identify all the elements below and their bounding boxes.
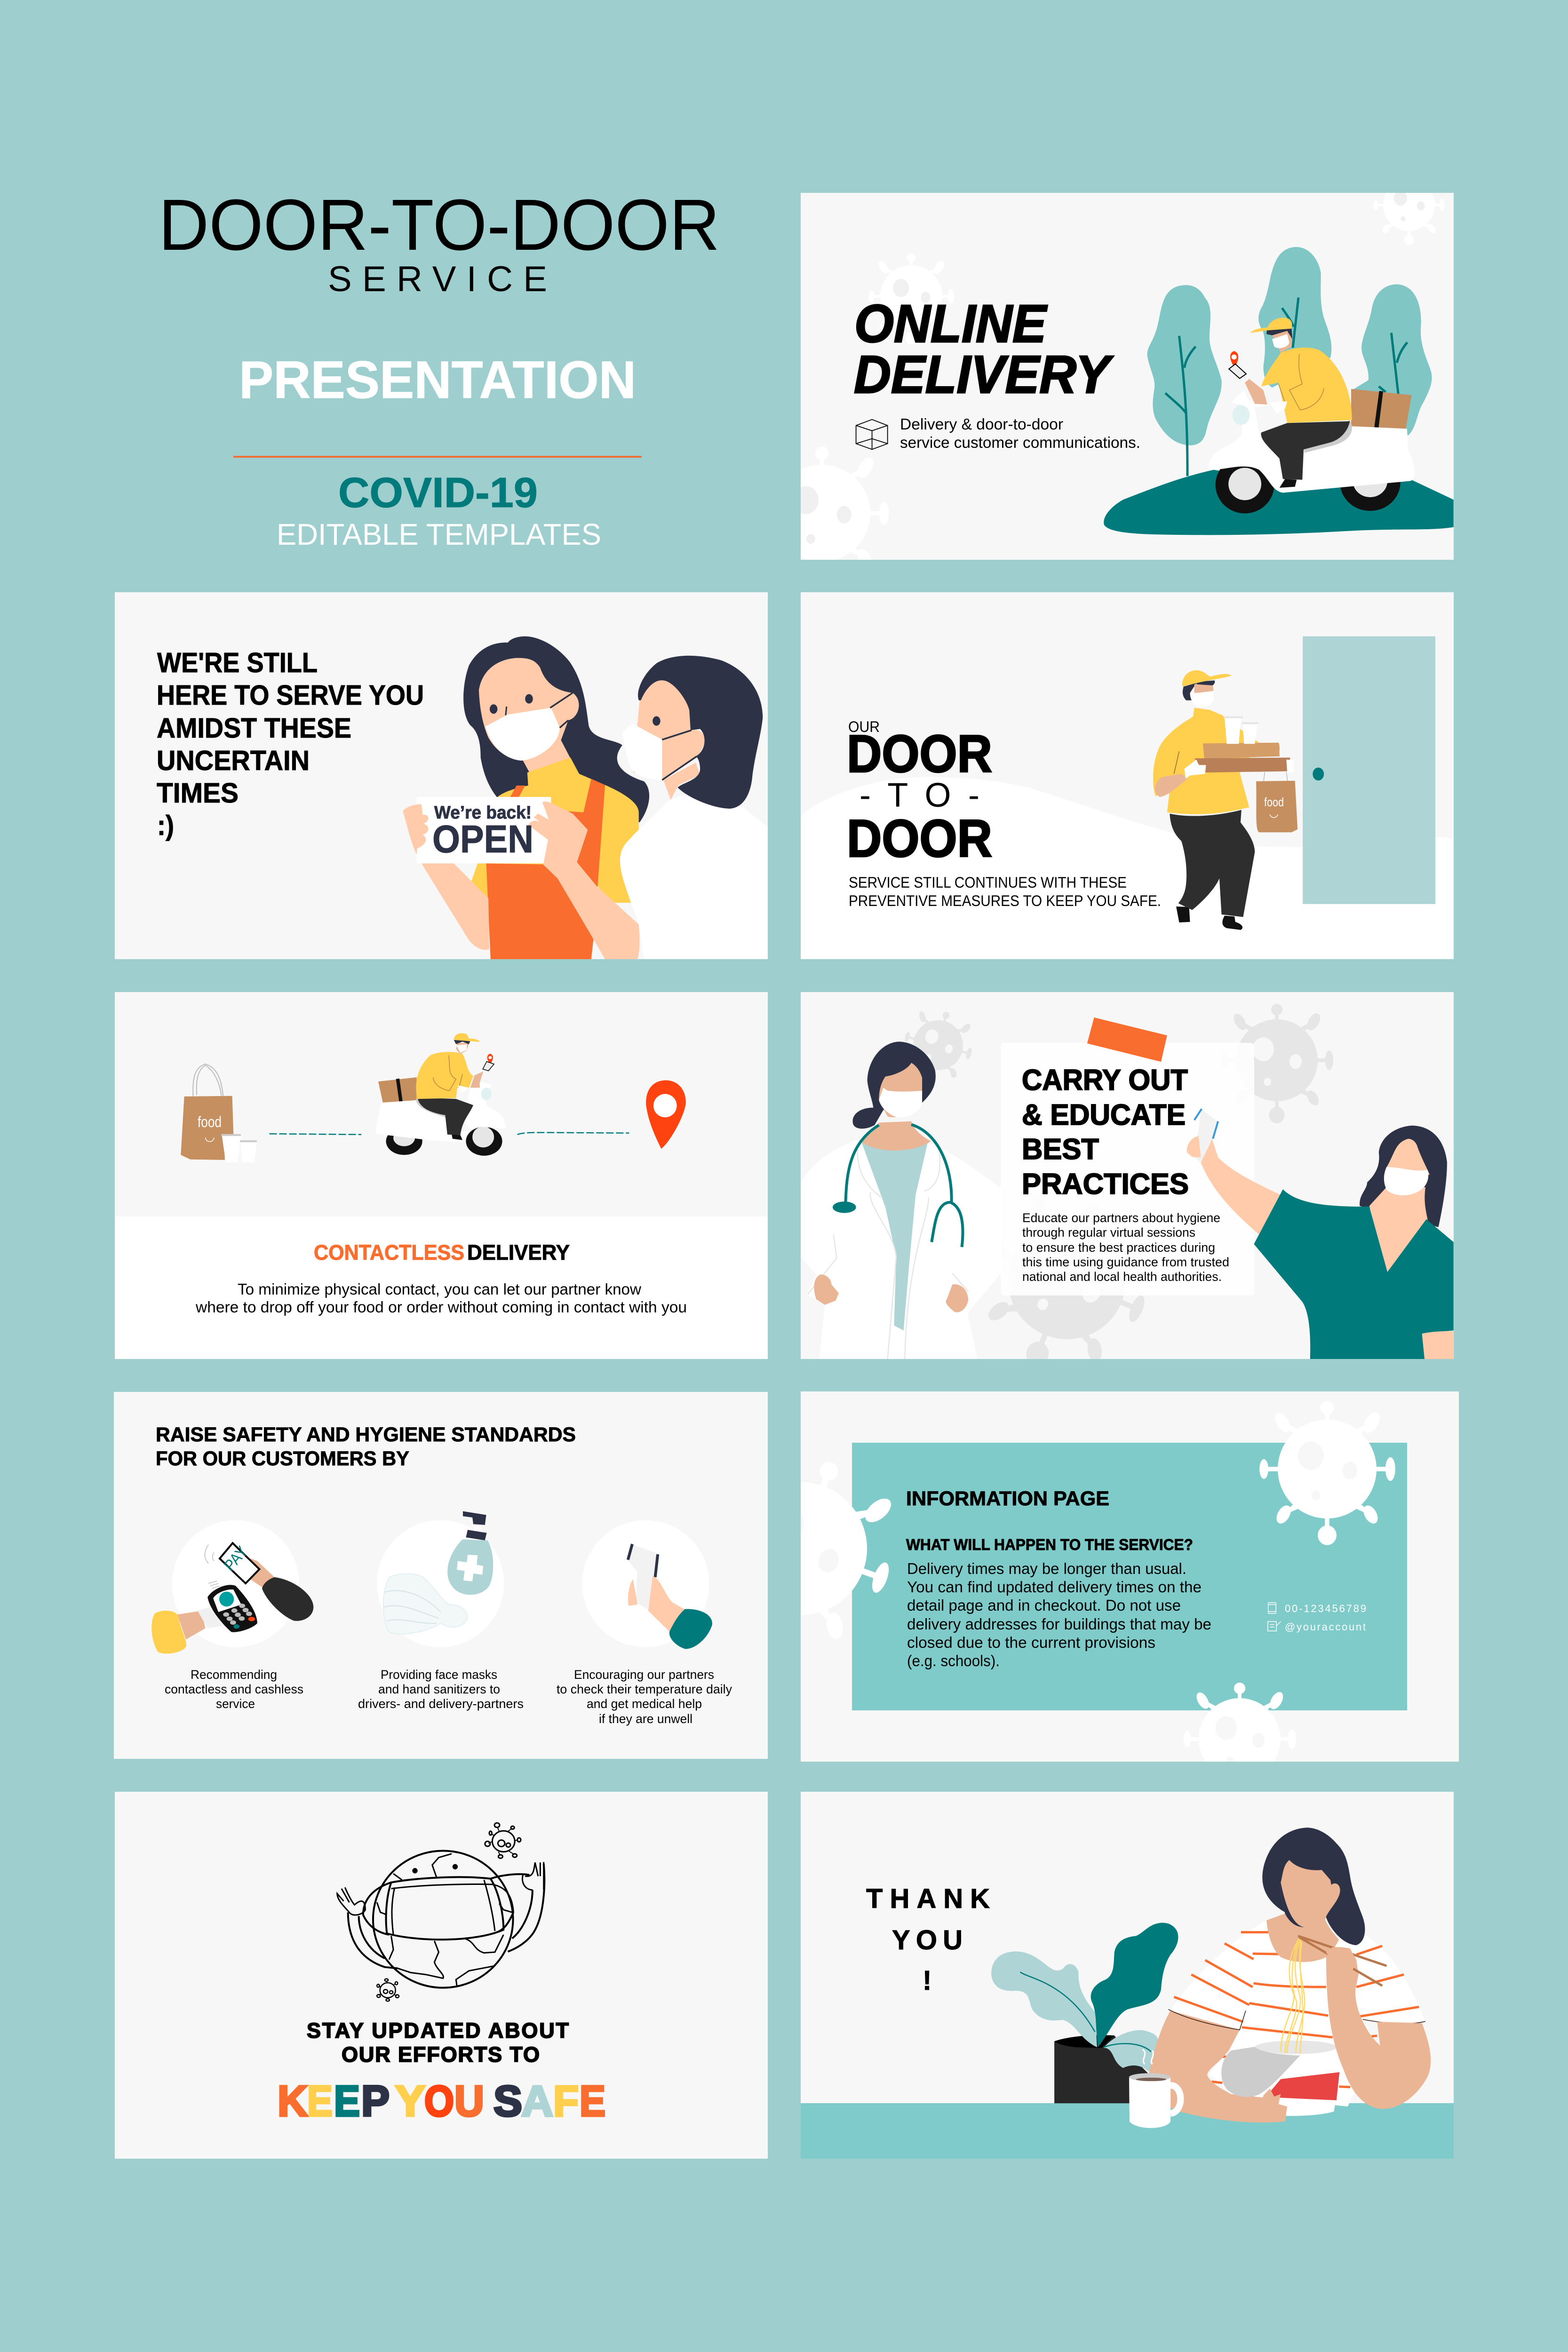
heading: still here <box>157 647 424 841</box>
description text: SERVICE STILL CONTINUES WITH THESE <box>849 874 1127 891</box>
heading: stay updated <box>307 2018 569 2066</box>
heading: carry out: CARRY OUT <box>1022 1064 1188 1097</box>
subheading: editable templates: EDITABLE TEMPLATES <box>277 517 601 551</box>
illustration: coffee mug <box>1129 2049 1181 2128</box>
caption: temperature checks: Encouraging our partners <box>574 1668 714 1682</box>
arrow: dashed route <box>270 1133 629 1135</box>
body text: You can find updated delivery times on the <box>907 1578 1202 1596</box>
caption: temperature checks <box>557 1668 732 1726</box>
body text <box>907 1560 1211 1669</box>
illustration: two women holding open sign <box>403 636 768 959</box>
illustration: courier at door <box>801 592 1454 930</box>
contact details <box>1268 1603 1366 1633</box>
contact: account: @youraccount <box>1285 1621 1366 1633</box>
heading: door to door: OUR <box>848 718 880 735</box>
caption: contactless service: service <box>216 1697 255 1711</box>
illustration: doctor <box>801 1041 1002 1359</box>
heading: door to door: DOOR <box>847 724 992 783</box>
heading: door to door: DOOR <box>847 809 992 868</box>
panel: contactless delivery <box>115 992 768 1359</box>
title block <box>159 184 720 551</box>
heading: thank you: ! <box>923 1965 931 1996</box>
caption: masks and sanitizers: Providing face masks <box>381 1668 497 1682</box>
illustration: woman eating noodles <box>1149 1828 1431 2122</box>
description text: To minimize physical contact, you can let our partner know <box>238 1280 641 1298</box>
heading: online delivery: DELIVERY <box>854 345 1114 404</box>
icon: face mask and hand sanitizer <box>377 1511 504 1647</box>
illustration: scooter rider with trees <box>1104 247 1454 535</box>
heading: presentation: PRESENTATION <box>239 350 636 409</box>
label: pay: PAY <box>221 1543 251 1574</box>
panel: our door to door <box>801 592 1454 959</box>
heading: still here: HERE TO SERVE YOU <box>157 680 424 711</box>
heading: keep you safe: O <box>424 2077 454 2125</box>
heading: thank you <box>866 1883 990 1996</box>
heading: information page: INFORMATION PAGE <box>906 1487 1109 1510</box>
caption: masks and sanitizers: and hand sanitizers to <box>378 1682 500 1696</box>
bag label: food <box>1264 795 1284 809</box>
illustration: globe wearing a mask <box>337 1851 544 1988</box>
body text: closed due to the current provisions <box>907 1634 1155 1651</box>
heading: carry out: BEST <box>1022 1133 1099 1166</box>
caption: contactless service: contactless and cashless <box>165 1682 303 1696</box>
background viruses <box>680 1401 1395 1802</box>
caption: contactless service: Recommending <box>191 1668 277 1682</box>
heading: door to door: - T O - <box>860 777 979 814</box>
description text: service customer communications. <box>900 434 1140 451</box>
heading: stay updated: STAY UPDATED ABOUT <box>307 2018 569 2042</box>
heading: keep you safe: F <box>553 2077 579 2125</box>
description text <box>1022 1211 1229 1284</box>
heading: door to door <box>847 718 992 868</box>
heading: keep you safe: E <box>334 2077 360 2125</box>
body text: (e.g. schools). <box>907 1652 1000 1669</box>
description text: through regular virtual sessions <box>1022 1225 1195 1240</box>
panel: best practices <box>801 992 1454 1395</box>
description text <box>849 874 1161 909</box>
caption: masks and sanitizers <box>358 1668 524 1711</box>
icon: phone <box>1268 1603 1276 1613</box>
bag label: food <box>198 1113 222 1130</box>
main title: DOOR-TO-DOOR <box>159 184 720 265</box>
description text: this time using guidance from trusted <box>1022 1255 1229 1269</box>
description text <box>900 418 1139 448</box>
heading: carry out: & EDUCATE <box>1022 1099 1186 1131</box>
background viruses <box>895 1003 1333 1395</box>
subtitle: service: SERVICE <box>328 259 547 299</box>
heading: still here: TIMES <box>157 778 239 809</box>
caption: temperature checks: to check their temperature daily <box>557 1682 732 1696</box>
illustration: woman with thermometer <box>1187 1109 1454 1359</box>
sign text: OPEN <box>432 817 533 861</box>
heading: raise safety: RAISE SAFETY AND HYGIENE STANDARDS <box>156 1423 576 1446</box>
heading: online delivery: ONLINE <box>854 294 1048 353</box>
panel: still here to serve you <box>115 592 768 959</box>
icon: virus large <box>485 1823 521 1858</box>
heading: still here: :) <box>157 810 174 841</box>
heading: contactless delivery: DELIVERY <box>467 1240 570 1264</box>
heading: keep you safe: E <box>307 2077 333 2125</box>
heading: carry out <box>1022 1064 1189 1200</box>
description text: national and local health authorities. <box>1022 1270 1222 1284</box>
background viruses <box>756 169 1445 588</box>
heading: thank you: THANK <box>866 1883 990 1914</box>
body text: Delivery times may be longer than usual. <box>907 1560 1186 1577</box>
illustration: scooter rider <box>376 1033 506 1156</box>
icon: location pin <box>646 1080 686 1149</box>
heading: online delivery <box>854 304 1115 393</box>
body text: detail page and in checkout. Do not use <box>907 1597 1181 1614</box>
heading: contactless delivery: CONTACTLESS <box>314 1240 464 1264</box>
icon: virus small <box>377 1979 399 2001</box>
illustration: food bag <box>181 1064 257 1162</box>
heading: keep you safe: A <box>521 2077 553 2125</box>
heading: covid-19: COVID-19 <box>338 469 538 516</box>
heading: keep you safe: U <box>454 2077 484 2125</box>
description text: to ensure the best practices during <box>1022 1240 1215 1255</box>
contact: phone number: 00-123456789 <box>1285 1603 1366 1614</box>
teal card <box>852 1443 1407 1710</box>
caption: masks and sanitizers: drivers- and delivery-partners <box>358 1697 524 1711</box>
body text: delivery addresses for buildings that may be <box>907 1615 1211 1633</box>
heading: still here: AMIDST THESE <box>157 713 351 744</box>
heading: keep you safe <box>278 2077 605 2125</box>
heading: raise safety <box>156 1423 576 1470</box>
heading: thank you: YOU <box>892 1925 963 1955</box>
sign text: We’re back! <box>434 803 532 823</box>
illustration: potted plant <box>991 1923 1178 2103</box>
heading: keep you safe: S <box>493 2077 522 2125</box>
illustration: orange tape <box>1087 1017 1167 1062</box>
heading: keep you safe: Y <box>395 2077 425 2125</box>
description text: PREVENTIVE MEASURES TO KEEP YOU SAFE. <box>849 892 1161 909</box>
caption: temperature checks: if they are unwell <box>599 1712 692 1726</box>
description text: where to drop off your food or order without coming in contact with you <box>195 1298 687 1316</box>
heading: keep you safe: P <box>361 2077 390 2125</box>
description text: Delivery & door-to-door <box>900 415 1063 433</box>
heading: still here: UNCERTAIN <box>157 745 310 776</box>
heading: still here: WE'RE STILL <box>157 647 318 678</box>
heading: raise safety: FOR OUR CUSTOMERS BY <box>156 1447 409 1470</box>
panel: information page <box>680 1391 1459 1802</box>
caption: temperature checks: and get medical help <box>587 1697 702 1711</box>
table <box>801 2103 1454 2159</box>
panel: safety and hygiene standards <box>114 1392 768 1759</box>
caption: contactless service <box>165 1668 303 1711</box>
panel: thank you <box>801 1792 1454 2159</box>
heading: contactless delivery <box>314 1240 570 1264</box>
panel: keep you safe <box>115 1792 768 2159</box>
description text: Educate our partners about hygiene <box>1022 1211 1220 1225</box>
icon: contactless payment <box>151 1520 313 1653</box>
subheading: what will happen: WHAT WILL HAPPEN TO THE SERVICE? <box>906 1536 1193 1553</box>
white card <box>1001 1043 1254 1295</box>
icon: box <box>856 420 888 449</box>
icon: note <box>1268 1621 1281 1631</box>
description text <box>195 1280 687 1316</box>
heading: carry out: PRACTICES <box>1022 1168 1189 1200</box>
panel: online delivery <box>801 193 1454 560</box>
heading: keep you safe: E <box>580 2077 605 2125</box>
heading: stay updated: OUR EFFORTS TO <box>342 2042 540 2066</box>
icon: hand with thermometer <box>582 1520 712 1649</box>
heading: keep you safe: K <box>278 2077 308 2125</box>
